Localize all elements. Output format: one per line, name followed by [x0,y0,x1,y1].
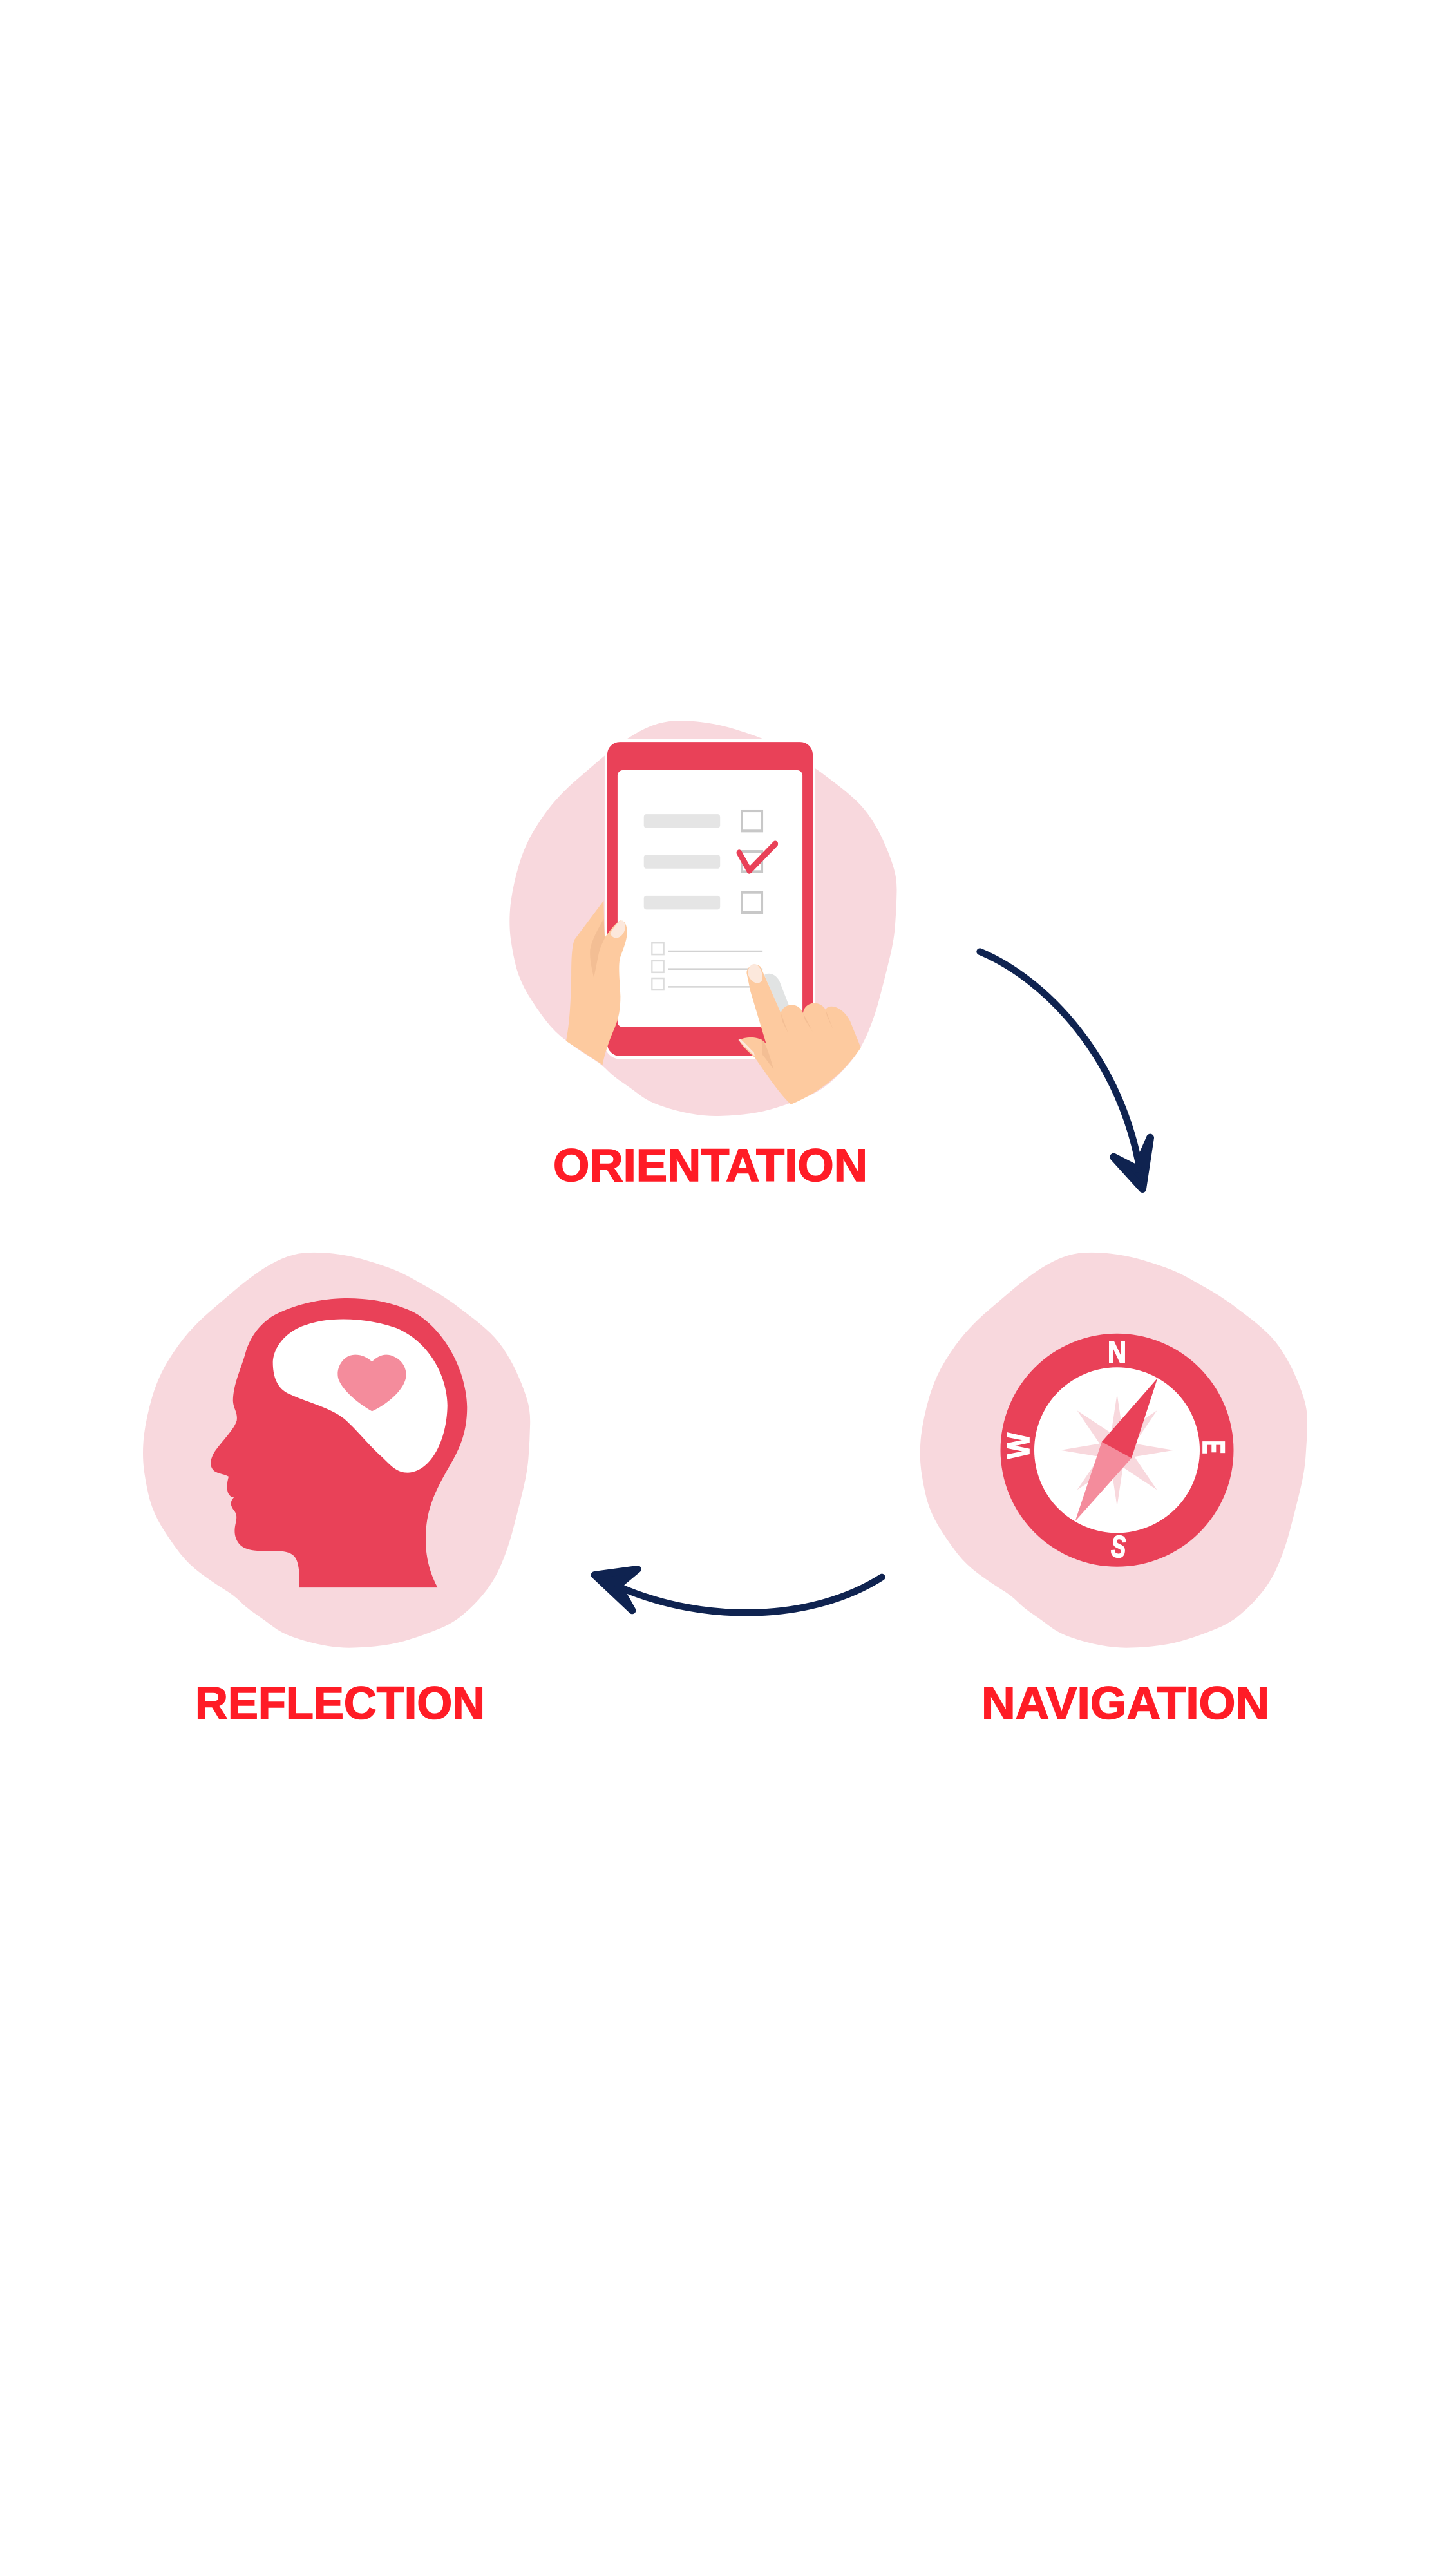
left hand [566,901,627,1065]
head silhouette [211,1298,467,1587]
arrow: orientation to navigation [980,952,1150,1189]
panel: reflection [143,1253,530,1729]
heading: orientation: ORIENTATION [553,1141,867,1191]
background blob: navigation [920,1253,1307,1648]
panel: navigation [920,1253,1307,1729]
compass ring [1001,1334,1234,1567]
heading: navigation: NAVIGATION [981,1678,1269,1729]
compass rose and needle [1061,1378,1173,1521]
panel: orientation [509,721,896,1191]
compass letters: S [1109,1530,1128,1565]
compass face [1034,1367,1200,1533]
background blob: reflection [143,1253,530,1648]
icon: head with heart [211,1298,467,1587]
brain area [273,1319,448,1473]
checklist rows [644,811,762,913]
tablet body [606,741,814,1057]
compass letters: N [1108,1336,1126,1370]
icon: compass [1001,1334,1234,1567]
icon: tablet with checklist held by hands [566,741,861,1104]
arrow: navigation to reflection [594,1569,882,1613]
heading: reflection: REFLECTION [195,1678,485,1729]
compass letters [1002,1336,1230,1565]
heart [337,1355,406,1411]
compass letters: E [1196,1440,1230,1454]
tablet screen [618,770,802,1027]
small checklist lines [652,943,762,990]
check mark [739,844,775,871]
background blob: orientation [509,721,896,1116]
compass letters: W [1002,1432,1036,1459]
right hand [738,964,861,1104]
